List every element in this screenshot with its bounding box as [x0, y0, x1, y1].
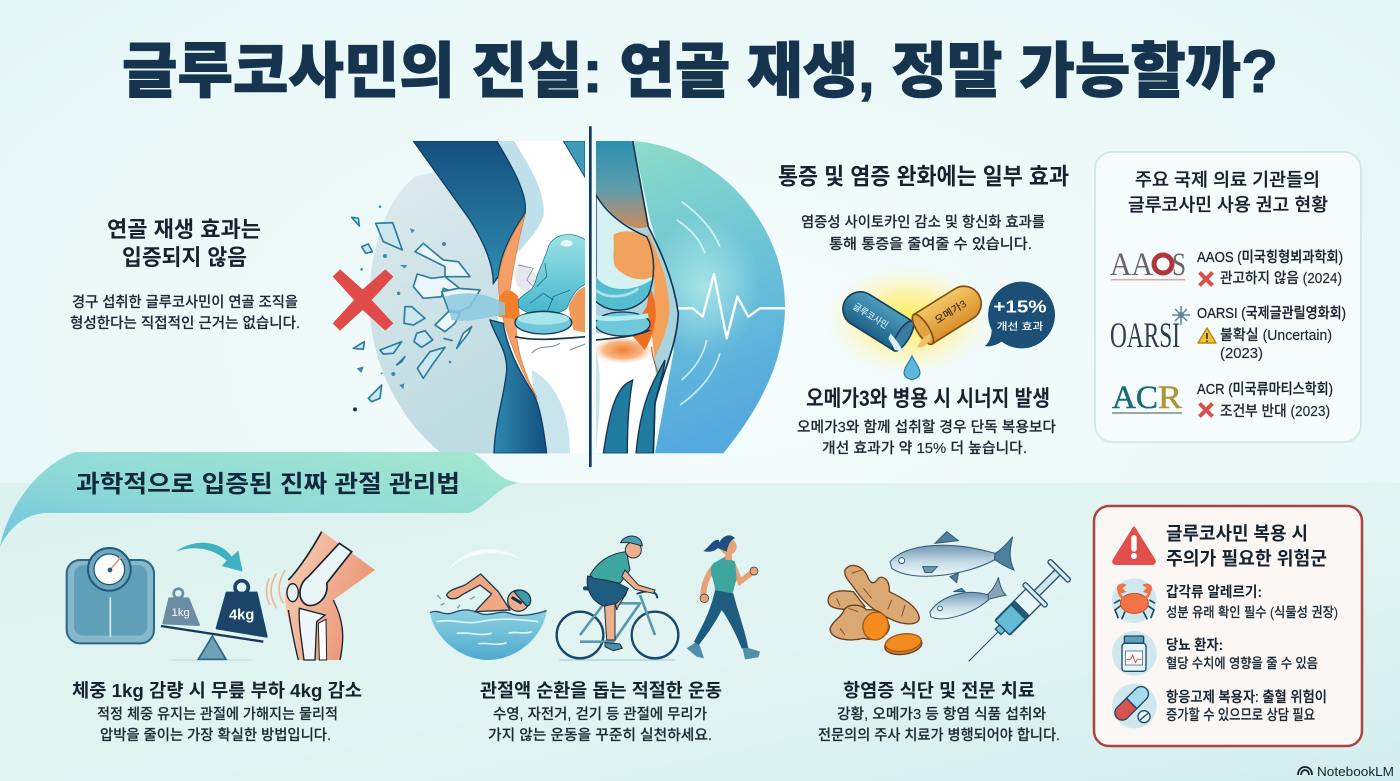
callout: +15%	[985, 282, 1055, 348]
OARSI row: OARSI	[1110, 315, 1180, 355]
left half: damaged knee	[369, 141, 588, 453]
section heading tab	[0, 452, 520, 547]
icon: 1kg weight	[163, 589, 199, 625]
OARSI row: 불확실 (Uncertain)	[1220, 327, 1332, 344]
divider line	[589, 126, 592, 467]
text block: cartilage regeneration not proven: 형성한다는 직접적인 근거는 없습니다.	[70, 315, 300, 332]
icon: omega-3 capsule	[909, 280, 988, 347]
text block: exercise: 가지 않는 운동을 꾸준히 실천하세요.	[488, 727, 712, 744]
icon: glucosamine capsule: 글루코사민	[851, 301, 890, 331]
right half: relieved knee	[592, 141, 785, 453]
text block: exercise: 관절액 순환을 돕는 적절한 운동	[480, 680, 722, 701]
icon: swimming, cycling, walking	[430, 535, 760, 660]
text: shellfish allergy: 성분 유래 확인 필수 (식물성 권장)	[1166, 605, 1338, 620]
text block: cartilage regeneration not proven: 입증되지 않음	[122, 245, 247, 270]
icon: drop	[904, 356, 920, 379]
arrow	[176, 543, 243, 572]
text block: cartilage regeneration not proven: 경구 섭취한 글루코사민이 연골 조직을	[72, 294, 298, 311]
icon: turmeric, fish and syringe	[828, 532, 1072, 673]
icon: glucosamine capsule	[836, 285, 918, 354]
text block: weight: 압박을 줄이는 가장 확실한 방법입니다.	[100, 727, 331, 744]
icon: scale, weights and knee	[67, 532, 375, 660]
icon: syringe	[957, 558, 1072, 673]
text block: synergy with omega-3: 개선 효과가 약 15% 더 높습니다.	[822, 440, 1027, 457]
OARSI row	[1110, 305, 1346, 362]
icon: walker	[687, 535, 760, 659]
AAOS row: 관고하지 않음 (2024)	[1220, 270, 1342, 287]
text: diabetes	[1166, 637, 1318, 671]
heading: 주요 국제 의료 기관들의	[1135, 170, 1320, 190]
icon: cartilage fragments	[352, 217, 480, 402]
icon: 4kg weight: 4kg	[229, 607, 254, 623]
text block: weight: 적정 체중 유지는 관절에 가해지는 물리적	[97, 706, 338, 723]
text block: synergy with omega-3	[797, 386, 1056, 457]
icon: 1kg weight: 1kg	[172, 607, 190, 619]
knee illustration: damaged cartilage vs inflammation relief	[333, 126, 785, 467]
text block: diet and treatment: 항염증 식단 및 전문 치료	[843, 680, 1035, 701]
AAOS row: AA	[1110, 247, 1153, 283]
ACR row	[1112, 380, 1333, 420]
icon: warning triangle	[1113, 527, 1155, 564]
ACR row: 조건부 반대 (2023)	[1220, 403, 1330, 420]
pulse line	[678, 274, 785, 338]
ACR row: AC	[1112, 380, 1158, 416]
text block: diet and treatment: 전문의의 주사 치료가 병행되어야 합니다.	[818, 727, 1060, 744]
watermark: NotebookLM: NotebookLM	[1317, 764, 1394, 779]
callout: +15%: 개선 효과	[997, 320, 1043, 333]
text: diabetes: 혈당 수치에 영향을 줄 수 있음	[1166, 655, 1318, 671]
text: shellfish allergy: 갑각류 알레르기:	[1166, 584, 1262, 601]
icon: red X	[333, 269, 393, 331]
heading: 주의가 필요한 위험군	[1166, 548, 1327, 569]
text block: pain relief: 통증 및 염증 완화에는 일부 효과	[778, 163, 1069, 189]
AAOS row	[1110, 247, 1343, 287]
text block: diet and treatment: 강황, 오메가3 등 항염 식품 섭취와	[837, 706, 1046, 723]
panel: international guidelines	[1095, 152, 1361, 442]
OARSI row: OARSI (국제글관릴영화회)	[1197, 305, 1346, 322]
heading: 글루코사민 복용 시	[1166, 523, 1308, 544]
OARSI row: (2023)	[1220, 346, 1263, 362]
title: 글루코사민의 진실: 연골 재생, 정말 가능할까?	[122, 38, 1278, 105]
text block: weight	[72, 680, 362, 744]
AAOS row: AAOS (미국힝형뵈과학회)	[1197, 249, 1343, 266]
icon: 4kg weight	[217, 581, 267, 637]
icon: large fish	[890, 532, 1014, 583]
text: anticoagulant users	[1166, 689, 1327, 724]
text: anticoagulant users: 항응고제 복용자: 출혈 위험이	[1166, 689, 1327, 706]
ACR row: R	[1158, 380, 1182, 416]
text block: exercise	[480, 680, 722, 744]
callout: +15%: +15%	[993, 297, 1047, 317]
text block: synergy with omega-3: 오메가3와 함께 섭취할 경우 단독 복용보다	[797, 419, 1056, 436]
text block: weight: 체중 1kg 감량 시 무릎 부하 4kg 감소	[72, 680, 362, 701]
icon: bottle	[1112, 631, 1157, 676]
icon: pill	[1112, 684, 1157, 728]
icon: omega-3 capsule: 오메가3	[933, 298, 969, 327]
heading: 글루코사민 사용 권고 현황	[1128, 195, 1328, 215]
AAOS row: S	[1172, 247, 1186, 283]
icon: crab	[1112, 578, 1157, 623]
icon: swimmer	[430, 549, 547, 660]
section heading tab: 과학적으로 입증된 진짜 관절 관리법	[76, 471, 460, 498]
heading	[1166, 523, 1327, 569]
text block: cartilage regeneration not proven	[70, 217, 300, 332]
text block: exercise: 수영, 자전거, 걷기 등 관절에 무리가	[493, 706, 707, 723]
text block: pain relief: 염증성 사이토카인 감소 및 항신화 효과를	[801, 214, 1045, 231]
ACR row: ACR (미국류마티스학회)	[1197, 381, 1333, 398]
text block: diet and treatment	[818, 680, 1060, 744]
text: anticoagulant users: 증가할 수 있으므로 상담 필요	[1166, 707, 1315, 724]
text: shellfish allergy	[1166, 584, 1338, 620]
icon: knee	[267, 532, 375, 660]
icon: cyclist	[557, 536, 678, 660]
text block: synergy with omega-3: 오메가3와 병용 시 시너지 발생	[806, 386, 1050, 411]
text block: pain relief: 통해 통증을 줄여줄 수 있습니다.	[829, 236, 1032, 253]
panel: risk groups	[1094, 506, 1362, 746]
icon: bathroom scale	[67, 548, 154, 643]
text block: pain relief	[778, 163, 1069, 253]
heading	[1128, 170, 1328, 215]
icon: small fish	[930, 577, 1006, 619]
icon: turmeric	[828, 565, 923, 657]
icon: seesaw	[161, 626, 263, 660]
text block: cartilage regeneration not proven: 연골 재생 효과는	[107, 217, 261, 242]
text: diabetes: 당뇨 환자:	[1166, 637, 1223, 654]
icon: capsules with +15% bubble	[825, 265, 1055, 379]
